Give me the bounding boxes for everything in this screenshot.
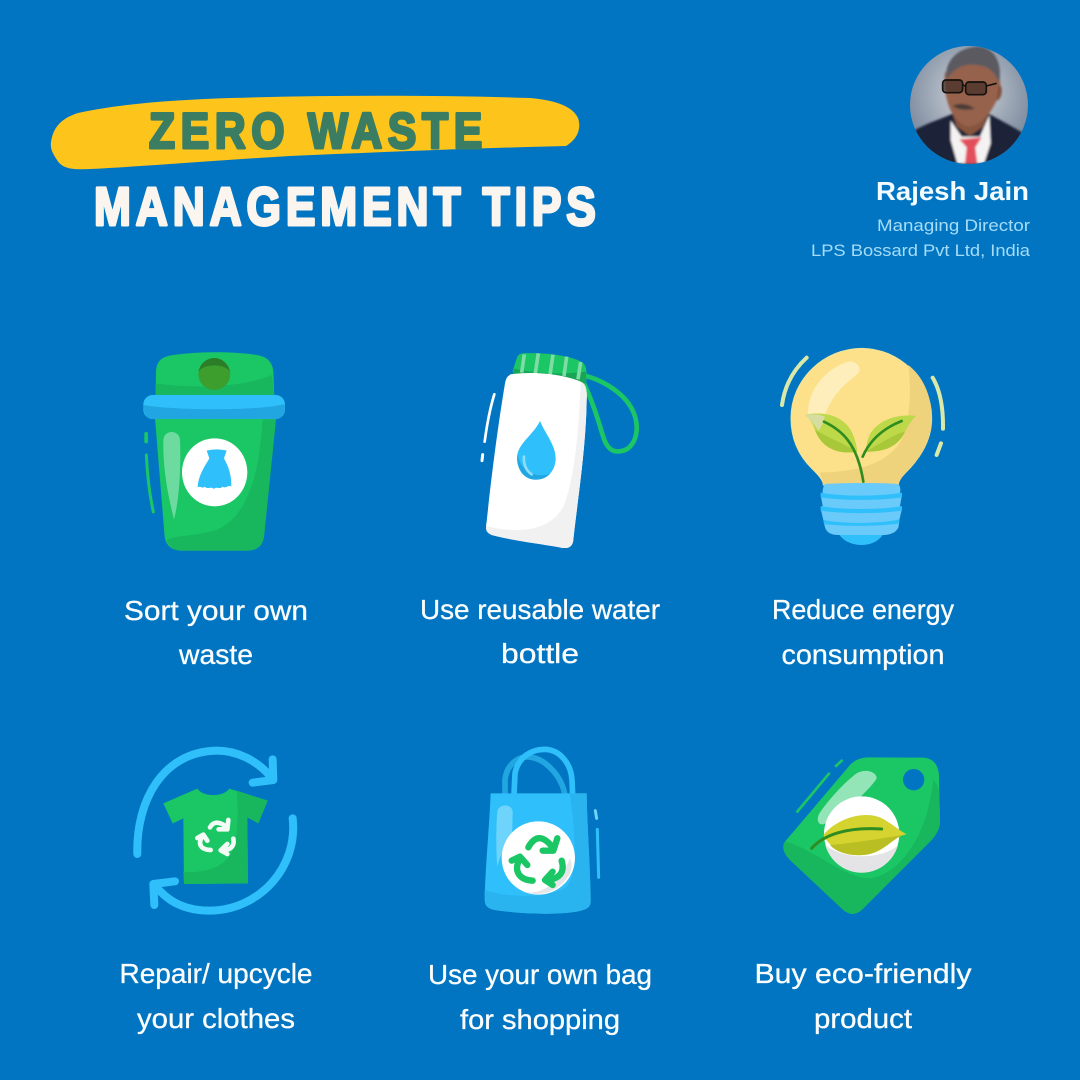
icon: shopping bag [485,749,599,914]
author name: Rajesh Jain [876,176,1029,206]
label: eco-friendly: Buy eco-friendly [754,958,972,989]
label: reusable bottle: Use reusable water [420,594,660,625]
icon: reusable water bottle [482,353,637,548]
label: reduce energy: consumption [782,639,944,670]
title line 1: ZERO WASTE [149,103,482,159]
author role: Managing Director [877,216,1030,235]
label: own bag: for shopping [460,1004,620,1035]
label: repair clothes: Repair/ upcycle [120,958,312,989]
author company: LPS Bossard Pvt Ltd, India [811,241,1031,260]
icon: recycling bin [143,352,285,551]
portrait photo [910,46,1030,167]
label: reduce energy: Reduce energy [772,594,954,625]
yellow brush stroke [51,96,579,169]
icon: eco price tag [783,757,940,914]
title line 2: MANAGEMENT TIPS [94,177,596,237]
label: sort waste: Sort your own [124,595,308,626]
icon: light bulb with sprout [782,348,943,545]
icon: recycled t-shirt [137,751,293,911]
title [51,96,596,237]
label: repair clothes: your clothes [137,1003,295,1034]
label: reusable bottle: bottle [501,638,579,669]
label: eco-friendly: product [814,1003,912,1034]
label: sort waste: waste [178,639,253,670]
label: own bag: Use your own bag [428,959,652,990]
